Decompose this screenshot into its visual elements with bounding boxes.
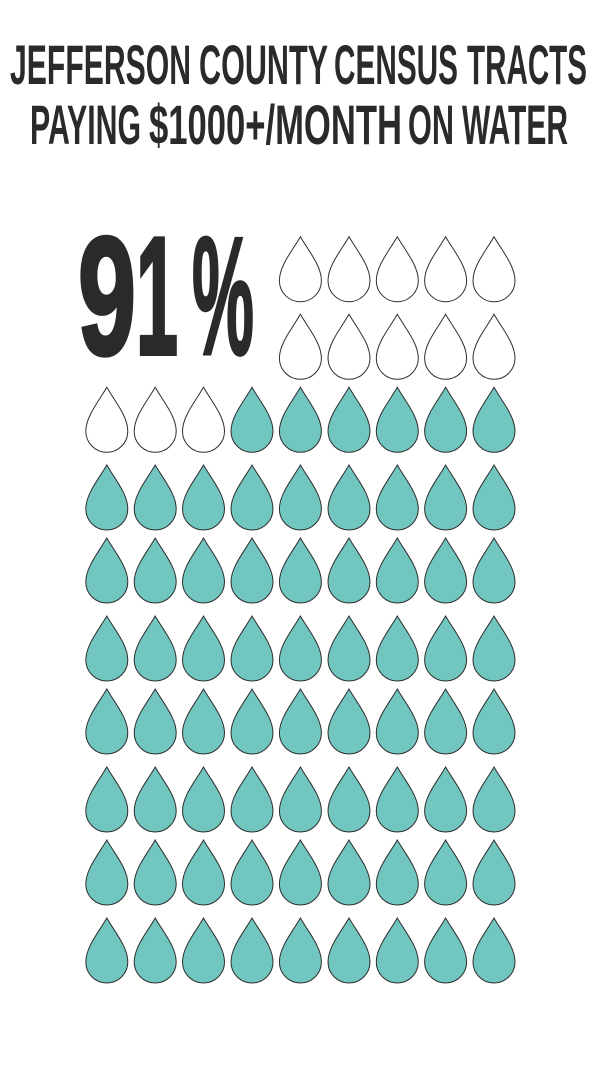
drop row 2: empty	[279, 314, 515, 379]
title: ON	[408, 93, 454, 156]
title	[10, 33, 587, 156]
drop row 8: filled	[86, 767, 515, 832]
title: $1000+/MONTH	[149, 93, 402, 156]
big percentage figure: 1	[136, 202, 178, 390]
big percentage figure	[78, 202, 254, 390]
title: CENSUS	[334, 33, 458, 96]
drop row 4: filled	[86, 465, 515, 530]
big percentage figure: 9	[78, 202, 136, 390]
text: %	[192, 202, 254, 390]
title: COUNTY	[199, 33, 328, 96]
drop row 9: filled	[86, 840, 515, 905]
drop row 5: filled	[86, 538, 515, 603]
drop row 6: filled	[86, 616, 515, 681]
title: JEFFERSON	[10, 33, 191, 96]
drop row 1: empty	[279, 237, 515, 302]
drop row 3: three empty, six filled	[86, 387, 515, 452]
drop row 7: filled	[86, 689, 515, 754]
title: PAYING	[30, 93, 141, 156]
drop row 10: filled	[86, 918, 515, 983]
